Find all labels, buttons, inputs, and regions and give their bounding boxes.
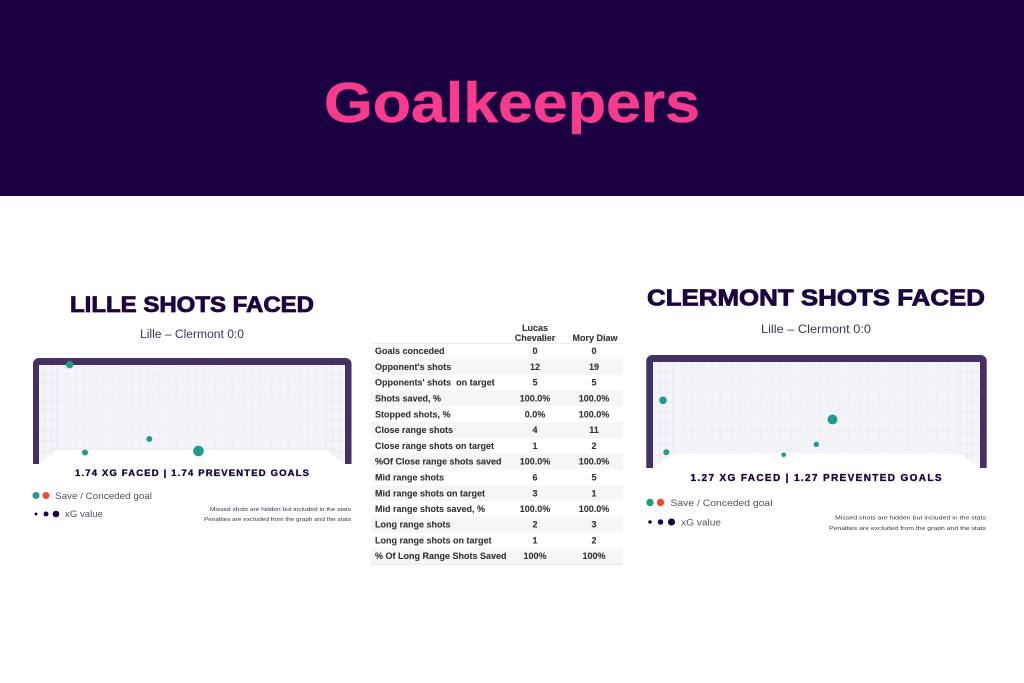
row stripes <box>371 359 623 564</box>
table rows: 100.0% <box>579 410 609 420</box>
stats line: Clermont: 1.27 XG FACED | 1.27 PREVENTED GOALS <box>690 473 942 484</box>
table rows: 1 <box>591 488 597 498</box>
footnotes: Clermont: Missed shots are hidden but included in the stats <box>835 516 986 522</box>
table rows: 0.0% <box>525 410 545 420</box>
shot markers: Clermont <box>659 396 838 457</box>
table rows: 2 <box>591 536 597 546</box>
panel: Clermont shots faced <box>646 284 987 532</box>
panel: stats table <box>371 323 623 564</box>
table rows: 5 <box>591 472 597 482</box>
stats line: Lille: 1.74 XG FACED | 1.74 PREVENTED GOALS <box>75 468 309 479</box>
table rows: 100.0% <box>579 394 609 404</box>
table rows: 100.0% <box>579 456 609 466</box>
table rows: Shots saved, % <box>375 394 441 404</box>
table rows: 100% <box>523 551 547 561</box>
match subtitle: Clermont: Lille – Clermont 0:0 <box>761 322 871 336</box>
table rows: 12 <box>530 362 540 372</box>
heading: Lille: LILLE SHOTS FACED <box>70 292 314 317</box>
table rows: 1 <box>532 536 538 546</box>
goal frame: Lille <box>33 358 352 464</box>
shot markers: Lille <box>66 361 204 456</box>
table rows: 3 <box>591 520 597 530</box>
table rows: Mid range shots on target <box>375 488 485 498</box>
match subtitle: Lille: Lille – Clermont 0:0 <box>140 329 244 341</box>
table rows: 5 <box>591 378 597 388</box>
footnotes: Lille: Penalties are excluded from the graph and the stats <box>204 517 351 523</box>
table rows: 100% <box>582 551 606 561</box>
table rows: 100.0% <box>520 394 550 404</box>
table rows: 6 <box>532 472 538 482</box>
table rows: 4 <box>532 425 538 435</box>
table rows: Close range shots on target <box>375 441 494 451</box>
table rows: Close range shots <box>375 425 453 435</box>
table rows: 100.0% <box>520 456 550 466</box>
table rows: 2 <box>591 441 597 451</box>
table rows: Goals conceded <box>375 346 445 356</box>
table rows: 2 <box>532 520 538 530</box>
table rows: 0 <box>532 346 538 356</box>
legend: xG value: xG value <box>681 518 721 528</box>
table rows: Mid range shots saved, % <box>375 504 485 514</box>
table rows: 3 <box>532 488 538 498</box>
footnotes: Lille: Missed shots are hidden but included in the stats <box>210 507 351 513</box>
footnotes: Lille <box>204 507 351 523</box>
table rows: Mid range shots <box>375 472 444 482</box>
heading: Clermont: CLERMONT SHOTS FACED <box>647 284 985 310</box>
table rows: 0 <box>591 346 597 356</box>
panel: Lille shots faced <box>32 292 352 523</box>
table rows: % Of Long Range Shots Saved <box>375 551 507 561</box>
table rows: %Of Close range shots saved <box>375 456 502 466</box>
table rows: 1 <box>532 441 538 451</box>
legend: xG value <box>648 518 721 528</box>
table rows: 100.0% <box>579 504 609 514</box>
table rows: Long range shots on target <box>375 536 492 546</box>
table rows: Opponent's shots <box>375 362 451 372</box>
legend: save or conceded: Save / Conceded goal <box>670 498 772 509</box>
goal frame: Clermont <box>646 355 987 468</box>
table rows <box>371 346 623 564</box>
table header: Lucas <box>522 323 548 333</box>
table rows: 100.0% <box>520 504 550 514</box>
table header: Mory Diaw <box>572 333 619 343</box>
legend: xG value <box>34 509 103 520</box>
table rows: 11 <box>589 425 599 435</box>
table rows: Long range shots <box>375 520 451 530</box>
table rows: 5 <box>532 378 538 388</box>
title: Goalkeepers <box>324 71 700 135</box>
table rows: Stopped shots, % <box>375 410 451 420</box>
legend: save or conceded: Save / Conceded goal <box>55 491 152 502</box>
footnotes: Clermont: Penalties are excluded from the graph and the stats <box>829 526 986 532</box>
table header <box>371 323 623 344</box>
header banner <box>0 0 1024 196</box>
table rows: Opponents' shots on target <box>375 378 495 388</box>
table rows: 19 <box>589 362 599 372</box>
footnotes: Clermont <box>829 516 986 532</box>
table header: Chevalier <box>515 333 556 343</box>
legend: xG value: xG value <box>65 509 103 520</box>
